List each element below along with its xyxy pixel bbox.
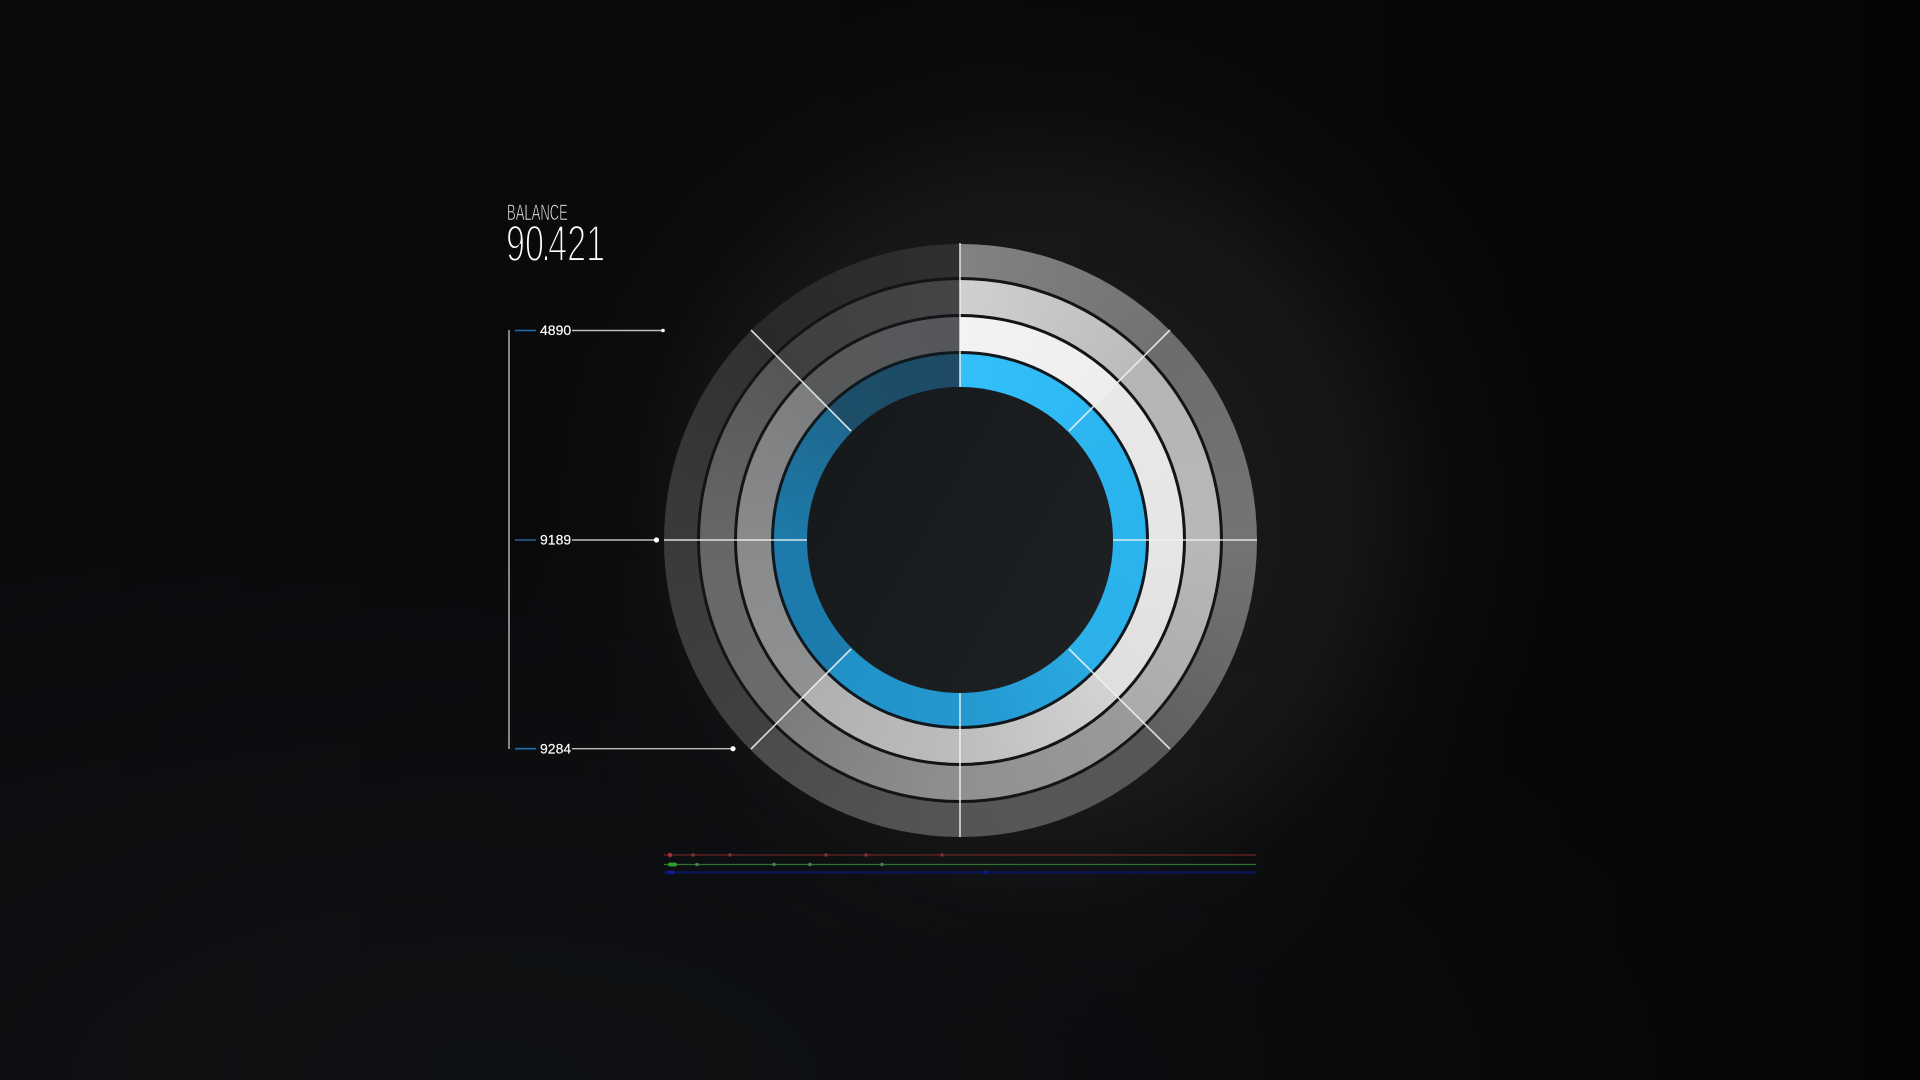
callout 4890: [515, 322, 665, 338]
ring 3: light ring: [737, 317, 1183, 763]
callout 9284: [515, 740, 736, 756]
green timeline: [664, 862, 1256, 866]
ring chart: [664, 244, 1257, 837]
radial spokes: [664, 243, 1257, 837]
balance value: 90.421: [506, 216, 605, 273]
blue timeline: [664, 870, 1256, 874]
gap 3: [771, 351, 1149, 729]
gap 1: [697, 277, 1223, 803]
callout 9189: 9189: [540, 532, 571, 548]
bracket line: [508, 330, 510, 749]
ring 4: blue ring: [774, 354, 1146, 726]
red timeline: [664, 853, 1256, 857]
balance label: BALANCE: [507, 199, 568, 225]
callout 4890: 4890: [540, 322, 571, 338]
ring 2: mid grey ring: [700, 280, 1220, 800]
gap 2: [734, 314, 1186, 766]
callout 9284: 9284: [540, 740, 571, 756]
ring 1: outer grey ring: [664, 244, 1256, 836]
inner disc: [807, 387, 1113, 693]
balance heading: [506, 199, 605, 273]
callout 9189: [515, 532, 659, 548]
